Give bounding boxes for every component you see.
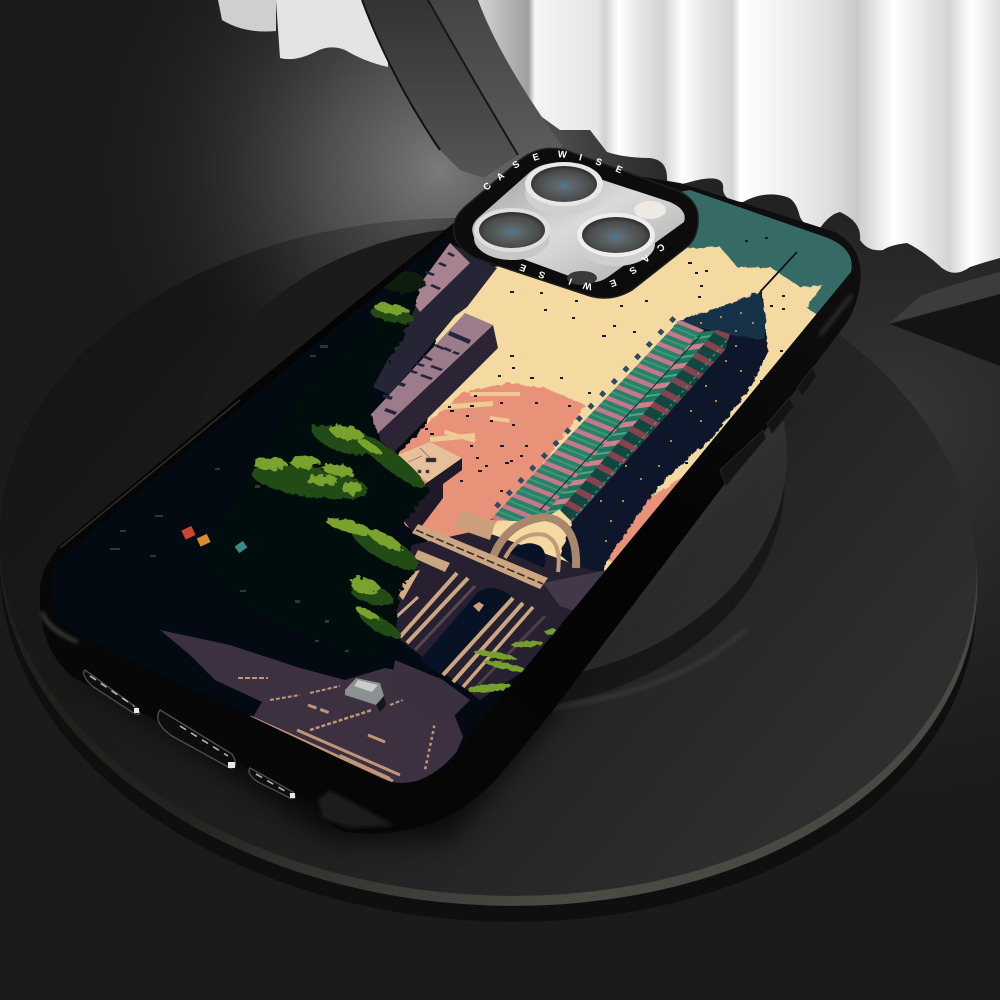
monument base — [390, 660, 470, 730]
car — [345, 678, 386, 712]
right annex — [543, 570, 607, 612]
tower crown — [676, 292, 766, 340]
tower lines — [540, 336, 727, 520]
large disc rim — [0, 194, 1000, 938]
building windows — [382, 331, 471, 415]
arched doorway — [420, 588, 512, 677]
flash — [634, 201, 666, 219]
lower right bushes — [468, 629, 559, 694]
arch band inner — [427, 0, 563, 160]
salmon clouds — [398, 382, 586, 542]
mauve building — [363, 313, 498, 453]
right stand object — [890, 272, 1000, 366]
phone case — [40, 160, 861, 834]
birds in sky — [425, 237, 785, 492]
top block — [453, 510, 495, 540]
large disc top — [0, 186, 999, 928]
monument dark body — [390, 530, 607, 700]
top dark tree — [381, 271, 425, 293]
small building shadow — [404, 458, 462, 535]
casewise lettering bottom: CASEWISE — [518, 241, 666, 292]
back dark buildings — [373, 243, 497, 395]
large disc — [0, 186, 1000, 954]
tree foliage — [110, 271, 559, 694]
camera island — [454, 148, 698, 298]
bottom ports — [84, 670, 295, 798]
right columns — [443, 598, 545, 687]
phone artwork — [50, 190, 852, 783]
port glints — [134, 708, 295, 798]
small disc side — [195, 246, 785, 710]
doorway ornament — [473, 602, 484, 612]
teal sky — [681, 190, 852, 370]
side buttons — [720, 367, 817, 486]
cream streaks — [430, 392, 520, 443]
case body — [40, 160, 861, 834]
left columns — [393, 573, 475, 650]
casewise lettering top: CASEWISE — [481, 149, 624, 193]
tower spire — [760, 252, 797, 292]
arcade lintel — [414, 550, 450, 572]
dim pixel details — [110, 345, 349, 652]
small disc top — [193, 227, 787, 683]
bright green foliage — [253, 302, 411, 623]
lens right — [577, 213, 655, 266]
large disc sheen — [0, 186, 999, 928]
tower right striped face — [560, 330, 730, 522]
tower middle striped face — [538, 330, 720, 522]
port highlights — [90, 676, 290, 794]
large disc side — [0, 212, 999, 954]
dark foliage mass — [200, 275, 430, 660]
art base dark — [50, 232, 520, 752]
arch band outer — [362, 0, 518, 178]
tower dark silhouette — [560, 290, 768, 585]
lower salmon sliver — [607, 478, 682, 562]
sensor — [567, 271, 597, 285]
tower left striped face — [490, 320, 704, 522]
cream cloud — [426, 246, 822, 606]
island glass — [472, 164, 685, 282]
road markings — [238, 678, 442, 781]
small disc — [193, 227, 787, 710]
mid green foliage — [250, 304, 430, 643]
curtain left — [218, 0, 388, 67]
arch opening — [510, 543, 545, 568]
curtain right — [470, 0, 1000, 273]
upper mauve building — [410, 243, 470, 312]
small cream building — [393, 442, 462, 535]
sand wall — [398, 570, 420, 600]
case bevel highlights — [42, 612, 78, 642]
arch stand — [362, 0, 563, 178]
arch rings — [492, 517, 576, 572]
island ring — [454, 148, 698, 298]
tower left bumps — [496, 316, 676, 507]
small building face — [393, 442, 462, 482]
building light face — [363, 313, 493, 438]
monument — [390, 510, 607, 730]
building shadow side — [373, 325, 498, 453]
lens left — [474, 208, 550, 260]
phone shadow — [60, 400, 820, 840]
monument cornice — [412, 524, 548, 589]
street — [160, 630, 463, 790]
traffic lights — [181, 526, 247, 553]
tower windows — [600, 312, 754, 542]
lens top — [525, 162, 603, 215]
